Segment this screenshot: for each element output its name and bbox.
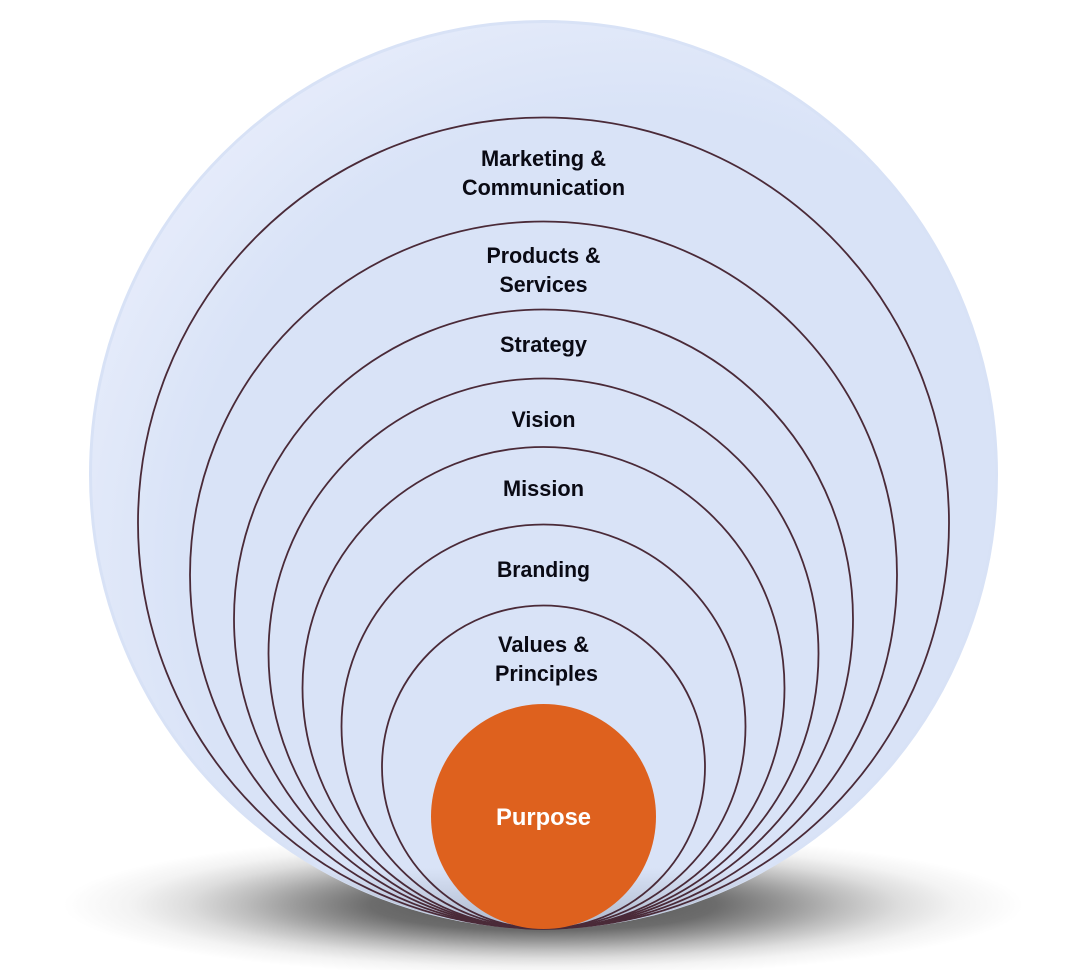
core circle: Purpose [431,704,656,929]
label: Purpose: Purpose [496,804,591,831]
label: Strategy: Strategy [500,332,588,357]
label: Branding: Branding [497,557,590,582]
outer circle [90,20,998,928]
ring: Mission [302,447,784,929]
label: Marketing &: Marketing & [481,146,606,171]
label: Vision: Vision [512,407,576,432]
label: Mission: Mission [503,476,584,501]
ring: Vision [268,378,818,928]
ring: Products & Services [190,222,897,928]
ring: Branding [342,524,746,928]
label: Values &: Values & [498,632,589,657]
label: Services: Services [500,272,588,297]
label: Principles: Principles [495,661,598,686]
label: Products &: Products & [486,243,601,268]
label: Communication: Communication [462,175,625,200]
ring: Values & Principles [382,606,705,928]
ground shadow [64,833,1024,970]
ring: Marketing & Communication [138,118,949,928]
ring: Strategy [234,310,853,928]
